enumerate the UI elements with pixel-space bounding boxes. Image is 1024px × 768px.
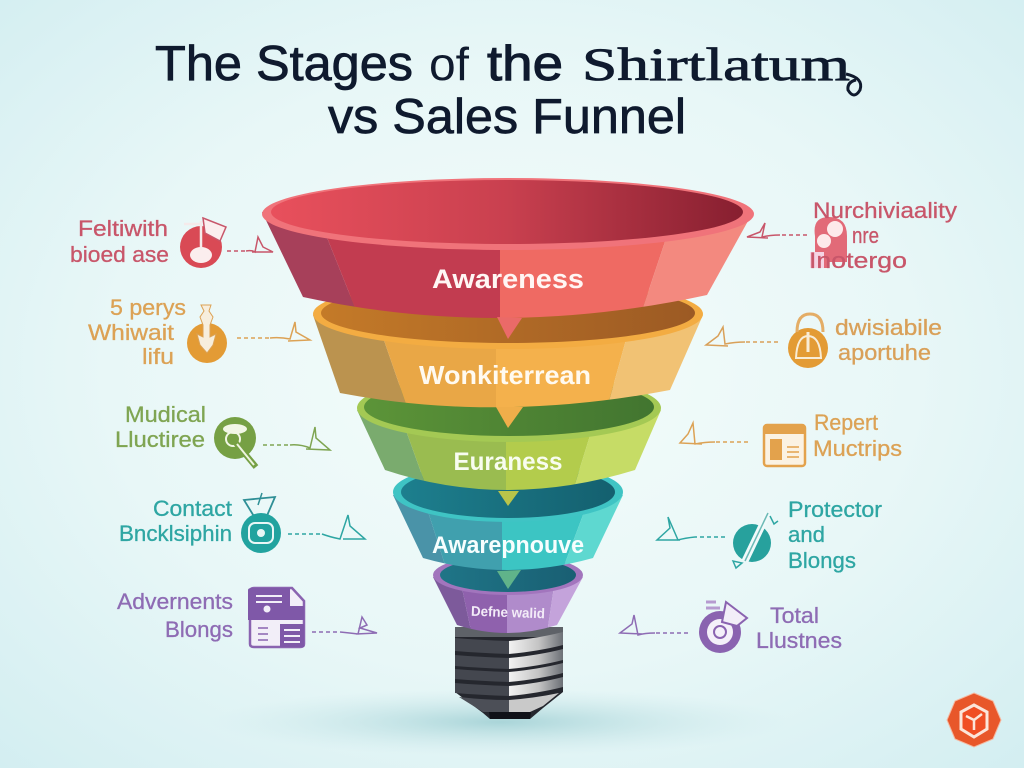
callout: nurchiviaality: Nurchiviaality [813, 198, 957, 223]
callout: nurchiviaality [747, 198, 957, 273]
funnel with bulb base [250, 178, 770, 719]
funnel stage 2: orange [313, 290, 703, 428]
callout: 5 perys: 5 perys [110, 295, 186, 320]
funnel stage 5: purple [433, 562, 583, 633]
callout: protector: Blongs [788, 548, 856, 573]
funnel stage 1: red [250, 178, 770, 340]
callout: felt with: Feltiwith [78, 216, 168, 241]
title: vs Sales Funnel [328, 90, 686, 144]
stage 3 pointer [498, 491, 519, 506]
stage 1 label: Awareness [432, 264, 584, 294]
callout: total [620, 602, 842, 653]
callout: nurchiviaality: Inotergo [809, 248, 907, 273]
callout: contact: Bncklsiphin [119, 521, 232, 546]
callout: dwisiabile: dwisiabile [835, 315, 942, 340]
callout: protector [657, 497, 882, 573]
callout: 5 perys: lifu [142, 344, 174, 369]
callout: contact [119, 493, 365, 553]
stage 2 label: Wonkiterrean [419, 360, 591, 390]
callout: dwisiabile [706, 314, 942, 368]
left callouts [70, 216, 377, 647]
title: of [429, 38, 469, 90]
callout: advernents: Blongs [165, 617, 233, 642]
stage 4 pointer [497, 570, 521, 589]
right callouts [620, 198, 957, 653]
funnel stage 3: green [357, 384, 661, 506]
callout: advernents: Advernents [117, 589, 233, 614]
callout: total: Llustnes [756, 628, 842, 653]
callout: 5 perys [88, 295, 310, 369]
callout: contact: Contact [153, 496, 232, 521]
stage 2 pointer [496, 407, 523, 428]
callout: protector: Protector [788, 497, 882, 522]
stage 3 label: Euraness [454, 448, 562, 476]
callout: mudical: Mudical [125, 402, 206, 427]
callout: felt with [70, 216, 273, 268]
title [155, 37, 861, 144]
callout: mudical [115, 402, 330, 467]
callout: advernents [117, 588, 377, 647]
title: Shirtlatum [582, 39, 850, 91]
title: The Stages [155, 37, 413, 91]
callout: nurchiviaality: nre [852, 223, 879, 248]
callout: protector: and [788, 522, 825, 547]
callout: felt with: bioed ase [70, 242, 169, 267]
funnel stage 4: teal [393, 468, 623, 589]
callout: repert [680, 410, 902, 466]
callout: total: Total [770, 603, 819, 628]
callout: dwisiabile: aportuhe [838, 340, 931, 365]
stage 4 label: Awarepnouve [432, 532, 584, 559]
title: the [487, 37, 563, 91]
callout: repert: Repert [814, 410, 878, 435]
stage 5 label: Defne walid [471, 603, 545, 621]
stage 1 pointer [497, 317, 522, 339]
callout: 5 perys: Whiwait [88, 320, 174, 345]
callout: repert: Muctrips [813, 436, 902, 461]
logo badge [947, 693, 1001, 747]
callout: mudical: Lluctiree [115, 427, 205, 452]
bulb base [455, 627, 563, 719]
